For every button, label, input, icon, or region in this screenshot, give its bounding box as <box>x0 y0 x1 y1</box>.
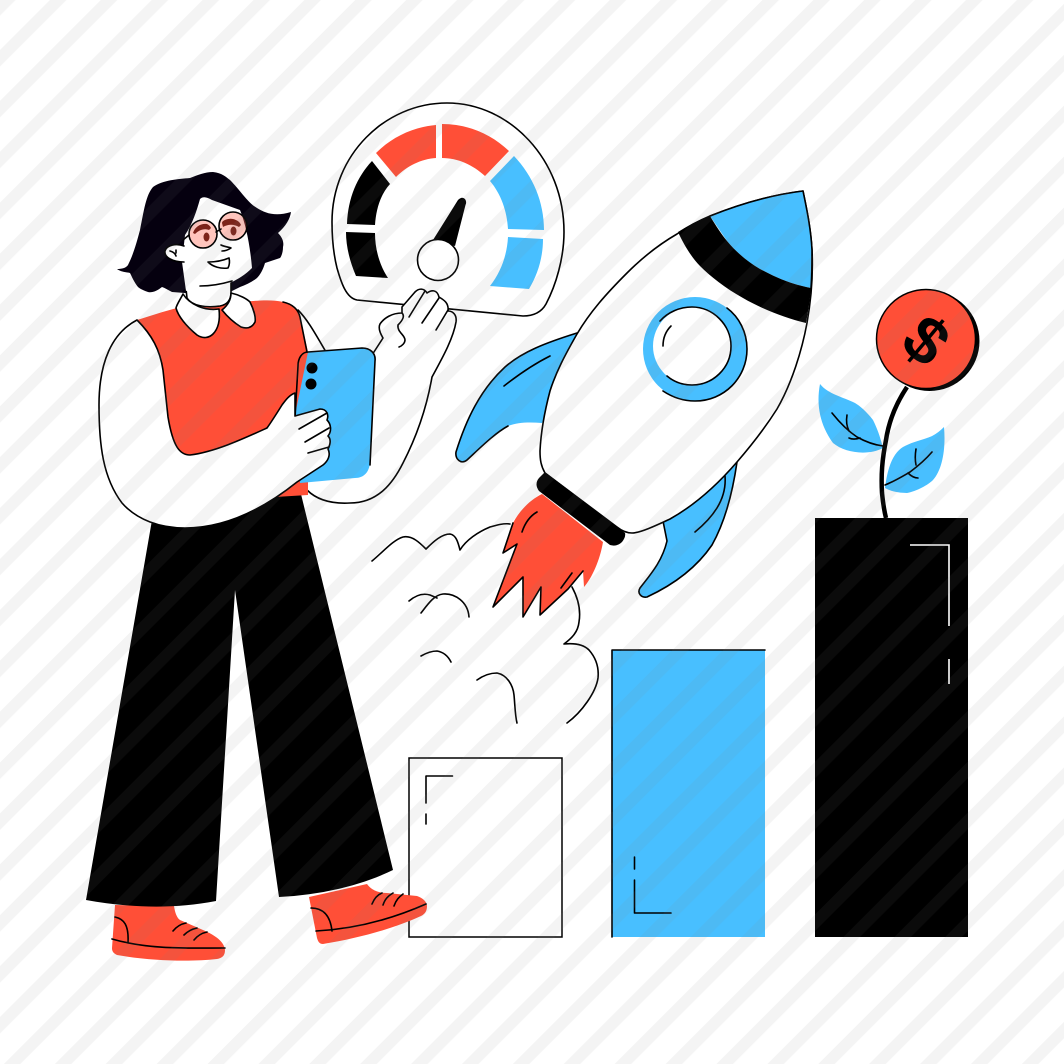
glasses <box>183 212 247 248</box>
gauge needle <box>433 198 466 246</box>
eyes <box>204 226 236 242</box>
gauge black segments <box>346 161 390 278</box>
coin shadow <box>880 291 980 391</box>
neck <box>185 275 231 307</box>
stem <box>882 387 907 518</box>
nose outline <box>710 191 812 288</box>
hair <box>117 172 291 293</box>
phone camera <box>306 362 318 374</box>
eyebrows <box>193 219 241 234</box>
flame <box>493 494 603 617</box>
right arm and raised hand <box>298 289 456 503</box>
right fin <box>639 462 737 597</box>
nose band <box>678 216 811 323</box>
vest <box>137 300 308 497</box>
rocket <box>456 191 812 617</box>
bar 2 blue <box>612 650 765 937</box>
jaw line <box>200 281 232 286</box>
face <box>182 197 252 291</box>
gauge blue segments <box>490 156 544 289</box>
rocket body <box>540 191 812 533</box>
engine nozzle <box>536 472 625 546</box>
speedometer gauge <box>332 103 564 316</box>
right leaf <box>885 427 945 493</box>
left leaf <box>819 384 883 453</box>
left shoe <box>112 905 225 961</box>
dollar sign: $ <box>889 300 964 380</box>
nose cone <box>710 191 812 288</box>
porthole <box>643 297 747 401</box>
ear <box>165 245 186 262</box>
smoke lines <box>372 524 598 723</box>
right shoe <box>309 884 427 944</box>
money plant <box>819 290 980 518</box>
collar <box>176 293 255 338</box>
coin <box>876 290 976 388</box>
gauge red segments <box>376 124 509 177</box>
gauge hub <box>418 240 458 280</box>
nose <box>221 245 231 251</box>
bar chart <box>409 518 968 937</box>
mouth <box>208 258 229 268</box>
vest edge line <box>283 302 307 352</box>
phone <box>295 348 375 483</box>
left sleeve and hand on phone <box>99 320 331 528</box>
trousers <box>86 490 393 907</box>
left fin <box>456 333 577 462</box>
person <box>86 172 456 961</box>
gauge body <box>332 103 564 316</box>
bar 1 white <box>409 758 562 937</box>
bar 3 black <box>815 518 968 937</box>
